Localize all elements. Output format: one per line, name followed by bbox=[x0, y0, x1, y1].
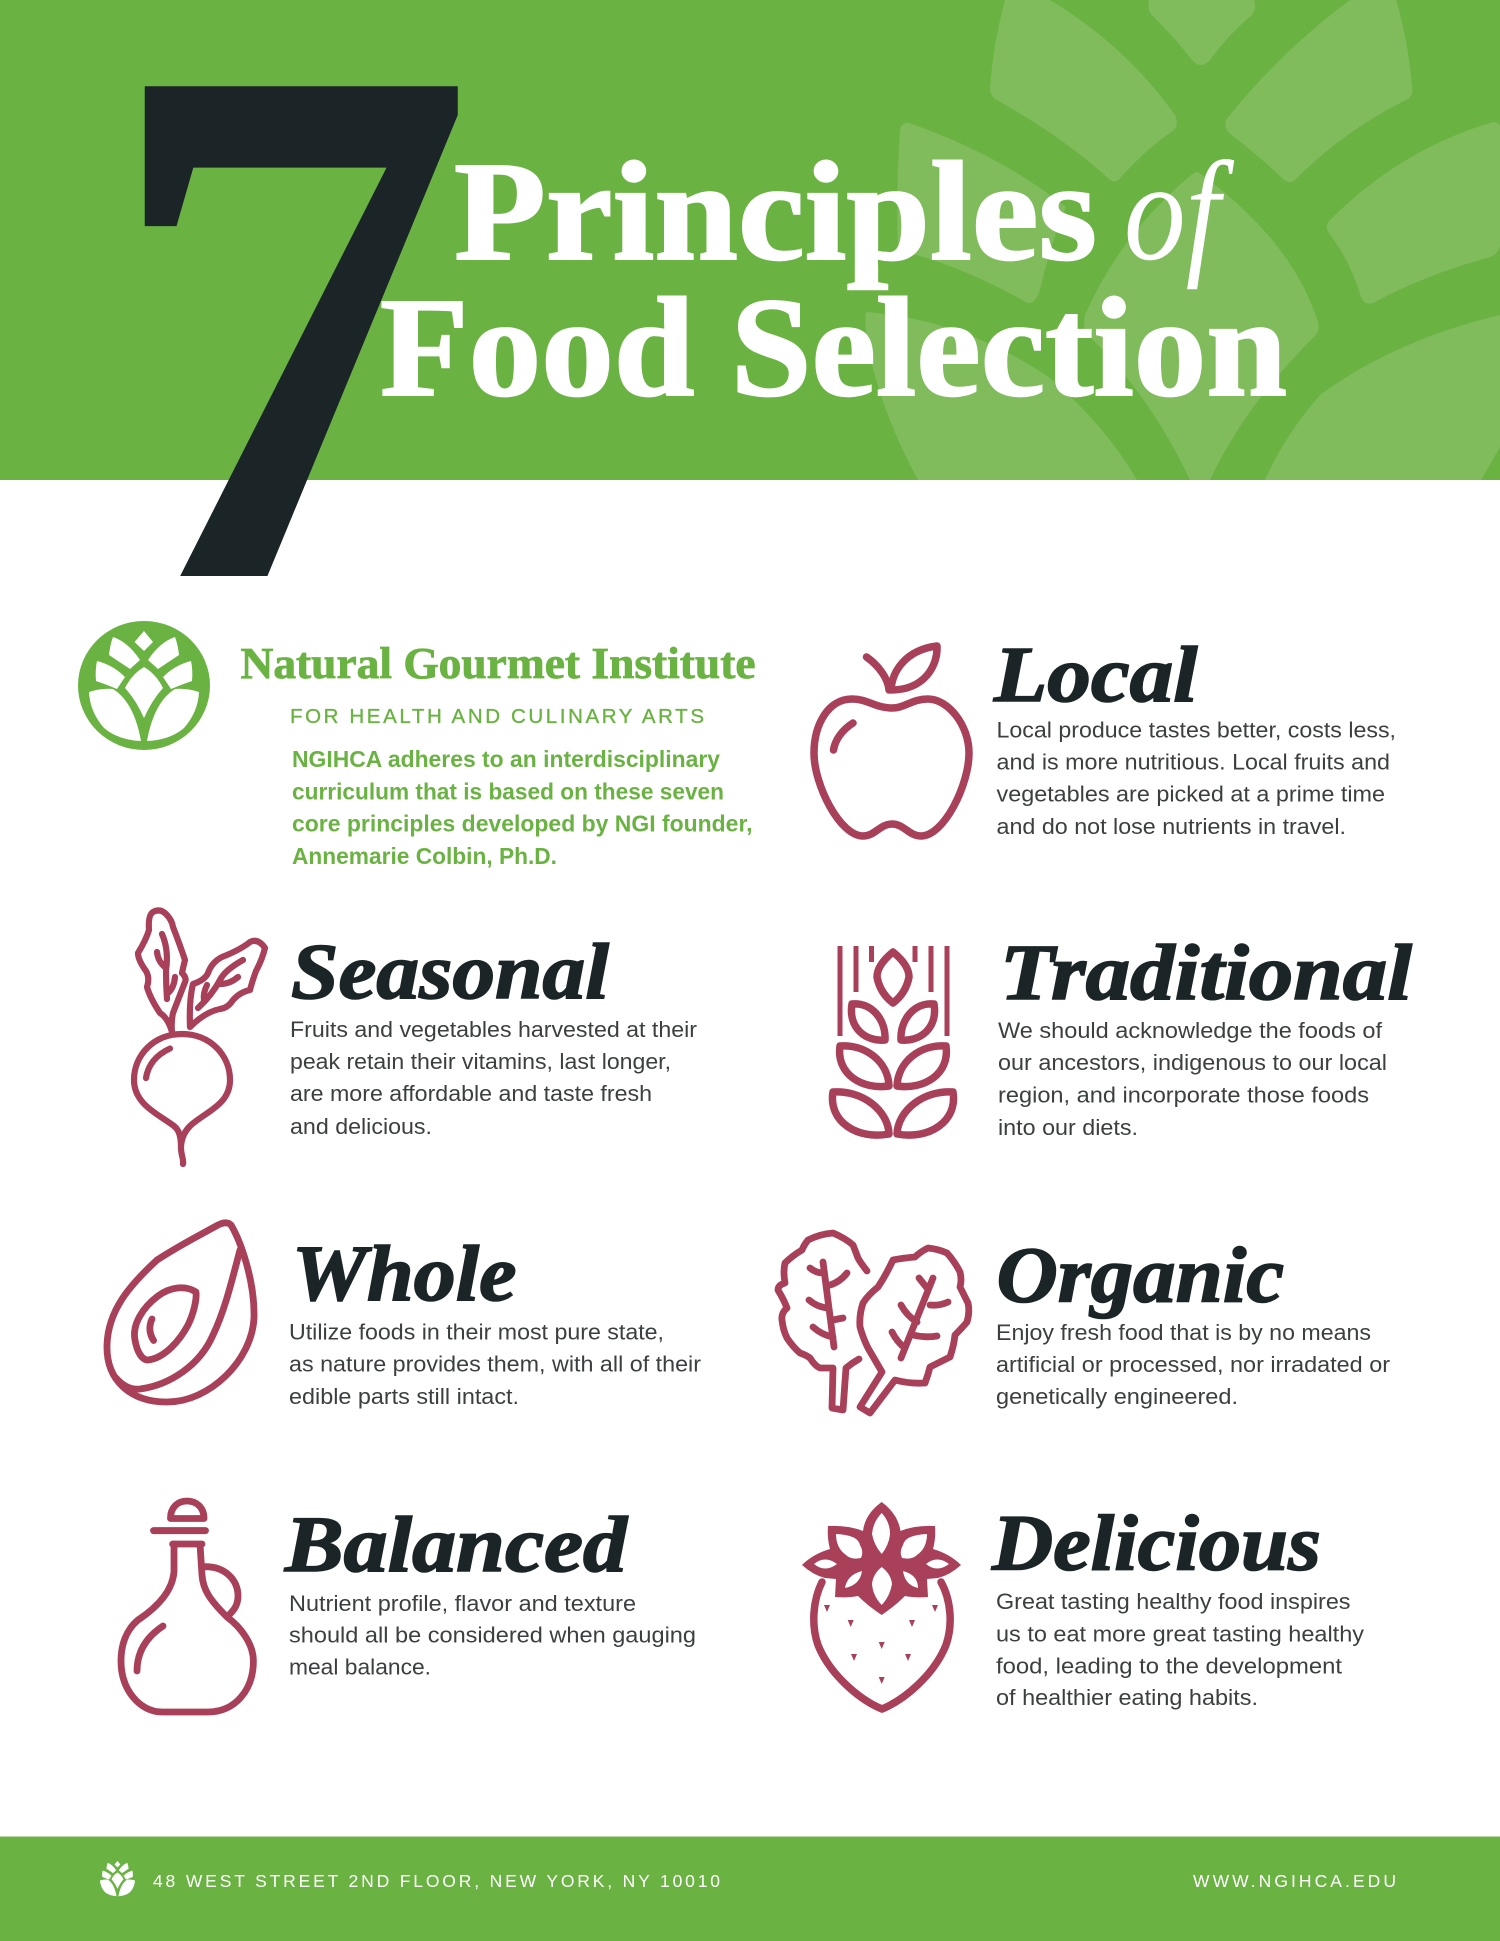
text: balanced: Nutrient profile, flavor and texture bbox=[289, 1591, 636, 1616]
text: delicious: Great tasting healthy food inspires bbox=[996, 1589, 1350, 1614]
institute description: curriculum that is based on these seven bbox=[292, 778, 724, 804]
text: organic: artificial or processed, nor irradated or bbox=[996, 1352, 1391, 1377]
institute description: NGIHCA adheres to an interdisciplinary bbox=[292, 746, 720, 772]
icon: artichoke logo bbox=[78, 621, 210, 750]
text: local bbox=[996, 718, 1396, 839]
text: delicious bbox=[996, 1589, 1365, 1710]
institute description bbox=[292, 746, 752, 869]
footer website: WWW.NGIHCA.EDU bbox=[1193, 1871, 1396, 1891]
text: whole: Utilize foods in their most pure state, bbox=[289, 1320, 664, 1344]
icon: avocado bbox=[107, 1223, 254, 1402]
panel: organic bbox=[778, 1232, 1391, 1413]
panel: whole bbox=[107, 1223, 702, 1409]
institute description: Annemarie Colbin, Ph.D. bbox=[292, 843, 557, 869]
icon: spinach leaves bbox=[778, 1233, 969, 1413]
text: local: Local produce tastes better, costs less, bbox=[996, 718, 1396, 743]
text: local: and is more nutritious. Local fruits and bbox=[996, 750, 1390, 774]
panel: traditional bbox=[832, 930, 1412, 1140]
text: balanced: meal balance. bbox=[289, 1654, 431, 1680]
heading: delicious: Delicious bbox=[991, 1500, 1321, 1588]
heading: local: Local bbox=[993, 632, 1198, 719]
text: whole: as nature provides them, with all of their bbox=[289, 1352, 702, 1376]
text: traditional: region, and incorporate those foods bbox=[998, 1082, 1369, 1108]
text: local: and do not lose nutrients in travel. bbox=[996, 814, 1346, 839]
icon: beet bbox=[134, 910, 265, 1164]
heading: organic: Organic bbox=[996, 1232, 1284, 1320]
text: organic: Enjoy fresh food that is by no means bbox=[996, 1320, 1371, 1345]
text: delicious: food, leading to the development bbox=[996, 1654, 1343, 1678]
heading: seasonal: Seasonal bbox=[291, 929, 609, 1016]
text: balanced bbox=[289, 1591, 696, 1680]
text: whole: edible parts still intact. bbox=[289, 1384, 519, 1409]
text: traditional bbox=[998, 1018, 1387, 1140]
heading: whole: Whole bbox=[292, 1231, 516, 1318]
icon: strawberry bbox=[802, 1502, 961, 1709]
title: of bbox=[1124, 132, 1234, 290]
icon: apple bbox=[814, 646, 969, 836]
institute name: Natural Gourmet Institute bbox=[240, 639, 756, 688]
text: seasonal: and delicious. bbox=[290, 1114, 432, 1139]
text: traditional: our ancestors, indigenous to our local bbox=[998, 1050, 1387, 1075]
institute tagline: FOR HEALTH AND CULINARY ARTS bbox=[290, 705, 704, 728]
icon: oil bottle bbox=[121, 1501, 253, 1712]
text: seasonal: peak retain their vitamins, last longer, bbox=[290, 1049, 671, 1074]
heading: balanced: Balanced bbox=[284, 1502, 629, 1589]
icon: wheat bbox=[832, 946, 954, 1135]
panel: delicious bbox=[802, 1500, 1365, 1710]
text: balanced: should all be considered when gauging bbox=[289, 1622, 696, 1648]
text: seasonal bbox=[290, 1017, 698, 1139]
text: delicious: of healthier eating habits. bbox=[996, 1685, 1258, 1710]
title: Food Selection bbox=[380, 268, 1287, 426]
text: seasonal: are more affordable and taste fresh bbox=[290, 1081, 652, 1106]
panel: institute intro bbox=[78, 621, 756, 869]
title: Principles bbox=[454, 132, 1097, 290]
text: traditional: into our diets. bbox=[998, 1115, 1138, 1140]
text: delicious: us to eat more great tasting healthy bbox=[996, 1622, 1365, 1646]
header artichoke watermark bbox=[865, 0, 1500, 480]
text: organic: genetically engineered. bbox=[996, 1384, 1238, 1409]
panel: seasonal bbox=[134, 910, 698, 1164]
panel: balanced bbox=[121, 1501, 696, 1712]
footer band bbox=[0, 1836, 1500, 1941]
text: traditional: We should acknowledge the foods of bbox=[998, 1018, 1383, 1043]
footer address: 48 WEST STREET 2ND FLOOR, NEW YORK, NY 10010 bbox=[153, 1871, 720, 1891]
text: whole bbox=[289, 1320, 702, 1409]
text: organic bbox=[996, 1320, 1391, 1409]
title bbox=[380, 132, 1287, 426]
institute description: core principles developed by NGI founder, bbox=[292, 810, 752, 836]
text: seasonal: Fruits and vegetables harvested at their bbox=[290, 1017, 698, 1042]
panel: local bbox=[814, 632, 1396, 839]
heading: traditional: Traditional bbox=[1000, 930, 1412, 1017]
header band bbox=[0, 0, 1500, 480]
text: local: vegetables are picked at a prime time bbox=[996, 782, 1385, 806]
icon: footer artichoke logo bbox=[100, 1861, 135, 1896]
